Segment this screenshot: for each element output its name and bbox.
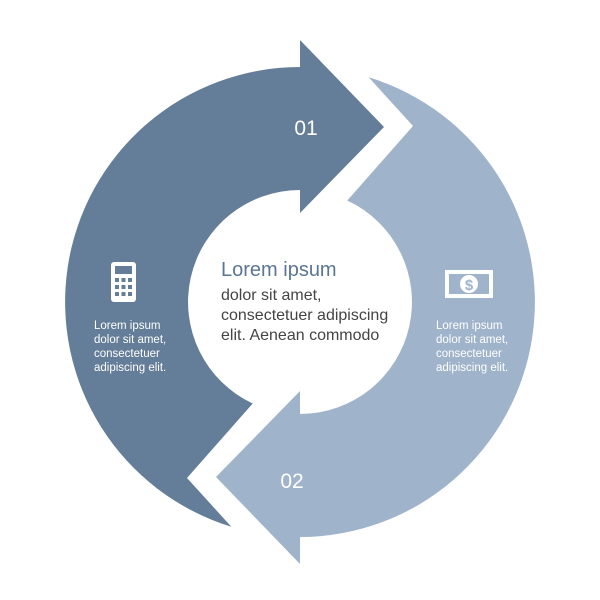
- number 02: 02: [280, 470, 304, 493]
- text: right: dolor sit amet,: [436, 334, 508, 346]
- center text: dolor sit amet,: [221, 287, 321, 304]
- icon: dollar bill: [445, 270, 493, 298]
- center heading: Lorem ipsum: [221, 259, 337, 281]
- text: right: Lorem ipsum: [436, 320, 502, 332]
- text: left: dolor sit amet,: [94, 334, 166, 346]
- icon: dollar bill: $: [465, 277, 474, 294]
- number 01: 01: [294, 117, 318, 140]
- text: left: consectetuer: [94, 348, 160, 360]
- text: right: adipiscing elit.: [436, 362, 508, 374]
- text: left: Lorem ipsum: [94, 320, 160, 332]
- icon: calculator: [111, 262, 136, 302]
- center text: consectetuer adipiscing: [221, 307, 388, 324]
- center text: elit. Aenean commodo: [221, 327, 379, 344]
- text: left: adipiscing elit.: [94, 362, 166, 374]
- text: right: consectetuer: [436, 348, 502, 360]
